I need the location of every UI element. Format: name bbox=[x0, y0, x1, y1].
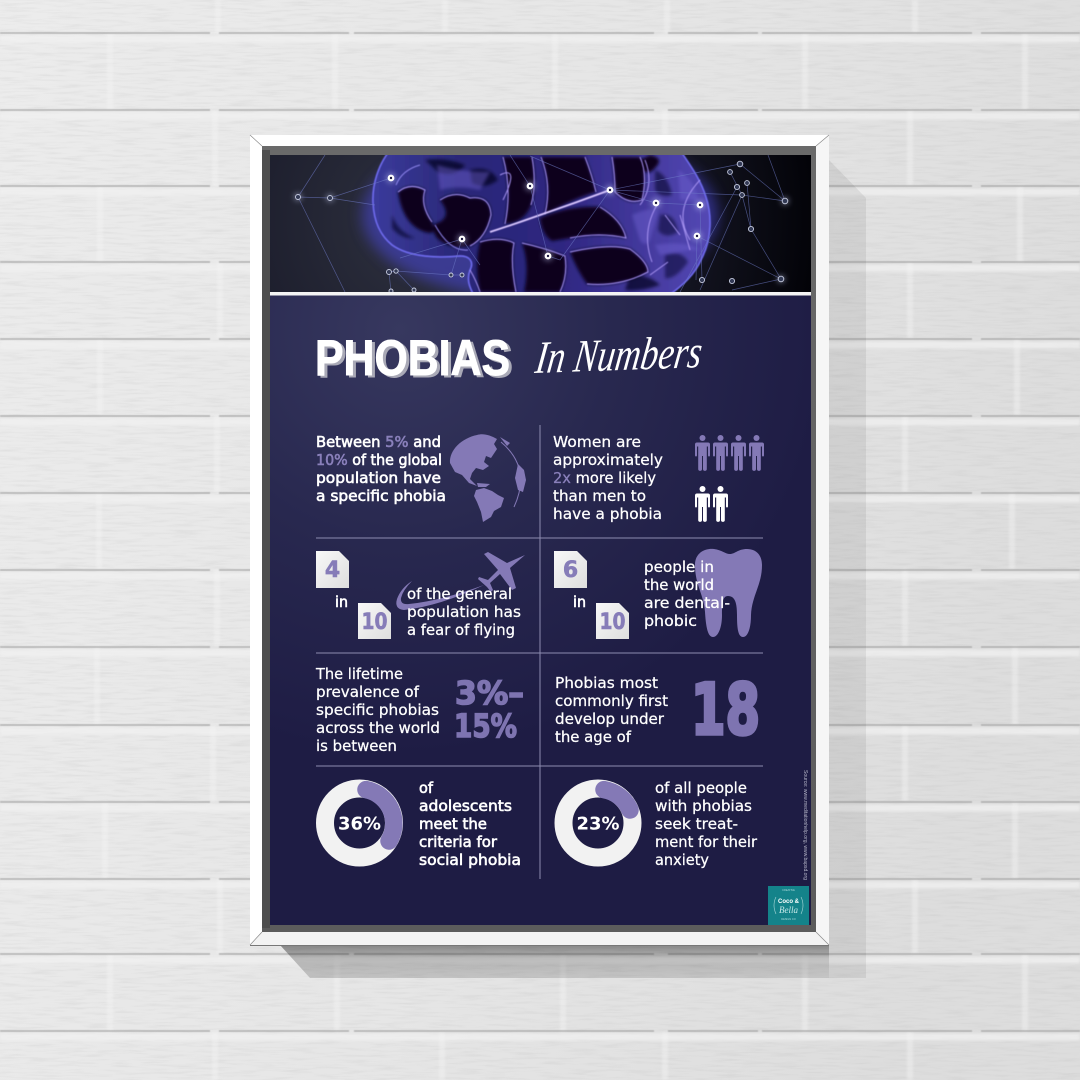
icon: globe bbox=[450, 434, 526, 522]
ridges bbox=[398, 157, 700, 292]
brain illustration bbox=[373, 150, 710, 296]
cell: age of onset: develop under bbox=[555, 710, 665, 728]
cell: seek treatment donut bbox=[564, 779, 758, 869]
logo: Coco and Bella: DESIGN CO bbox=[781, 917, 796, 921]
dark folds bbox=[392, 155, 688, 292]
cell: women vs men: approximately bbox=[553, 451, 663, 469]
card: 4: 4 bbox=[325, 558, 340, 583]
card: 4 bbox=[316, 551, 349, 588]
cell: lifetime prevalence: prevalence of bbox=[316, 683, 420, 701]
cell: age of onset: commonly first bbox=[555, 692, 668, 710]
cell: women vs men: Women are bbox=[553, 433, 641, 451]
cell: global population: population have bbox=[316, 469, 441, 487]
poster body panel bbox=[270, 295, 811, 925]
cell: lifetime prevalence bbox=[315, 665, 524, 755]
cell: fear of flying bbox=[316, 551, 525, 639]
cell: fear of flying: population has bbox=[407, 603, 521, 621]
white picture frame bbox=[250, 135, 829, 946]
cell: lifetime prevalence: The lifetime bbox=[315, 665, 403, 683]
cell: age of onset: the age of bbox=[555, 728, 632, 746]
cell: adolescents donut: of bbox=[419, 779, 434, 797]
cell: age of onset: Phobias most bbox=[555, 674, 658, 692]
card: 10 bbox=[596, 603, 629, 639]
cell: age of onset bbox=[555, 669, 760, 751]
cell: lifetime prevalence: across the world bbox=[316, 719, 440, 737]
title: PHOBIAS bbox=[318, 332, 513, 388]
cell: adolescents donut: social phobia bbox=[419, 851, 521, 869]
stat: 3%–15%: 3%– bbox=[455, 674, 524, 712]
cell: global population bbox=[316, 433, 526, 522]
title: PHOBIAS bbox=[315, 330, 510, 386]
card: 6 bbox=[554, 551, 587, 588]
logo: Coco and Bella: CREATIVE bbox=[782, 888, 795, 892]
icon: airplane with swoosh bbox=[396, 552, 525, 610]
logo: Coco and Bella: Bella bbox=[779, 905, 798, 915]
stat: 3%–15%: 15% bbox=[454, 707, 517, 745]
cell: dental phobia: the world bbox=[644, 576, 714, 594]
cell: adolescents donut: criteria for bbox=[419, 833, 498, 851]
cell: fear of flying: of the general bbox=[407, 585, 512, 603]
cell: seek treatment donut: with phobias bbox=[655, 797, 752, 815]
cell: dental phobia: people in bbox=[644, 558, 714, 576]
cell: adolescents donut: adolescents bbox=[419, 797, 512, 815]
cell: women vs men bbox=[553, 433, 764, 523]
cell: seek treatment donut: seek treat- bbox=[655, 815, 738, 833]
grid dividers bbox=[316, 425, 763, 879]
logo: Coco and Bella bbox=[768, 886, 809, 925]
icon: four women bbox=[695, 435, 764, 471]
lit lobes bbox=[437, 165, 700, 255]
cell: global population: Between 5% and bbox=[316, 433, 441, 451]
title: In Numbers bbox=[532, 327, 706, 384]
cell: global population: a specific phobia bbox=[316, 487, 446, 505]
poster header: brain image bbox=[270, 155, 811, 292]
stat: 3%–15% bbox=[454, 674, 524, 745]
cell: fear of flying: a fear of flying bbox=[407, 621, 515, 639]
donut chart: 36%: 36% bbox=[338, 814, 381, 834]
cell: lifetime prevalence: is between bbox=[316, 737, 397, 755]
cell: dental phobia: are dental- bbox=[644, 594, 730, 612]
label: in: in bbox=[573, 593, 586, 611]
cell: dental phobia bbox=[554, 549, 762, 639]
icon: tooth bbox=[695, 549, 762, 637]
title bbox=[315, 327, 706, 388]
icon: two men bbox=[695, 486, 728, 522]
brain glow bbox=[354, 156, 726, 292]
cell: women vs men: 2x more likely bbox=[553, 469, 656, 487]
cell: seek treatment donut: of all people bbox=[655, 779, 747, 797]
cell: women vs men: have a phobia bbox=[553, 505, 662, 523]
cell: seek treatment donut: ment for their bbox=[655, 833, 758, 851]
card: 10: 10 bbox=[362, 610, 388, 635]
logo: Coco and Bella: Coco & bbox=[778, 899, 800, 905]
header divider line bbox=[270, 292, 811, 296]
donut chart: 23% bbox=[564, 788, 632, 858]
donut chart: 36% bbox=[325, 788, 394, 858]
source note: Source: www.meditationhelp.org, www.bapsd.org bbox=[802, 770, 808, 880]
card: 10: 10 bbox=[600, 610, 626, 635]
label: in: in bbox=[335, 593, 348, 611]
card: 10 bbox=[358, 603, 391, 639]
cell: seek treatment donut: anxiety bbox=[655, 851, 709, 869]
cell: women vs men: than men to bbox=[553, 487, 646, 505]
cell: lifetime prevalence: specific phobias bbox=[316, 701, 439, 719]
cell: global population: 10% of the global bbox=[316, 451, 442, 469]
cell: dental phobia: phobic bbox=[644, 612, 697, 630]
cell: adolescents donut: meet the bbox=[419, 815, 487, 833]
network nodes bbox=[294, 161, 789, 293]
cell: adolescents donut bbox=[325, 779, 521, 869]
donut chart: 23%: 23% bbox=[576, 814, 620, 834]
frame shadow on wall bbox=[280, 160, 866, 978]
network lines bbox=[298, 155, 785, 292]
card: 6: 6 bbox=[563, 558, 578, 583]
stat: 18: 18 bbox=[691, 669, 760, 751]
